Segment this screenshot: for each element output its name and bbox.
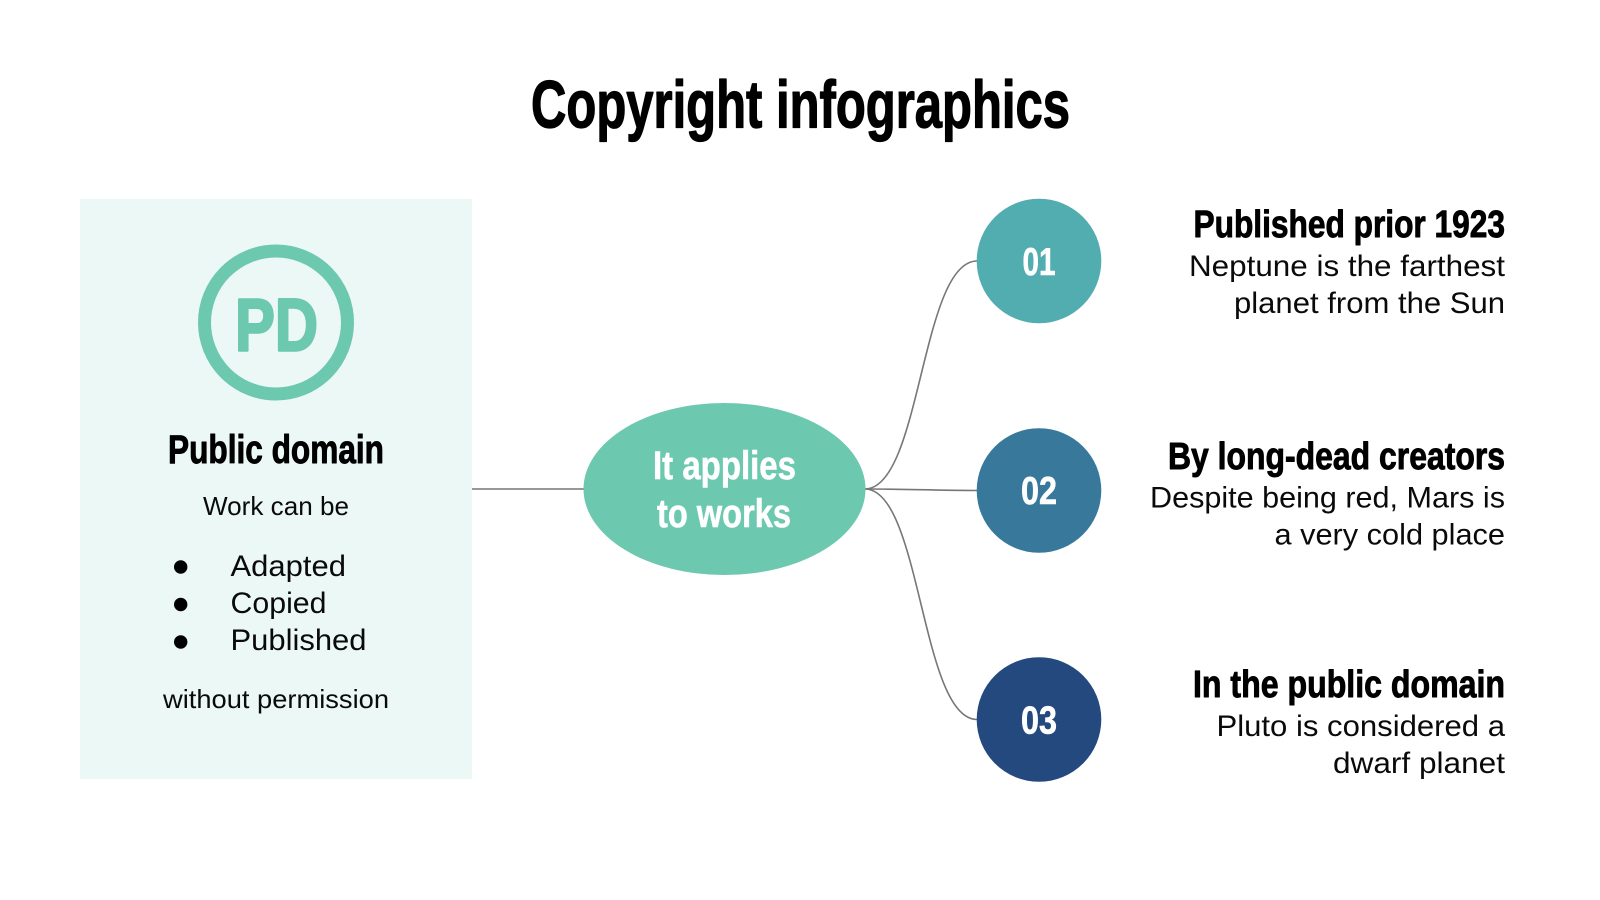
number circle 01 [977, 199, 1101, 323]
bullet list: Adapted [230, 550, 346, 583]
panel: public domain [80, 199, 472, 779]
item 1 text: Published prior 1923 [1194, 204, 1505, 246]
panel heading: Public domain [168, 428, 384, 472]
connectors [472, 261, 977, 720]
intro text: Work can be [203, 491, 349, 521]
bullet list: Published [230, 624, 366, 657]
icon: public domain badge [204, 251, 348, 394]
item 2 text: Despite being red, Mars is [1150, 482, 1505, 514]
number circle 03: 03 [1021, 700, 1057, 742]
item 1 text [1189, 204, 1506, 320]
item 1 text: planet from the Sun [1234, 287, 1505, 320]
closing text: without permission [162, 684, 389, 714]
bullet list: Copied [230, 587, 326, 620]
number circle 02: 02 [1021, 470, 1057, 513]
number circle 03 [977, 657, 1101, 782]
title: Copyright infographics [531, 68, 1070, 142]
item 1 text: Neptune is the farthest [1189, 250, 1506, 283]
central ellipse [584, 403, 866, 575]
item 3 text [1193, 664, 1506, 780]
central ellipse: to works [657, 492, 791, 536]
item 2 text: By long-dead creators [1168, 436, 1505, 478]
number circle 01: 01 [1022, 241, 1056, 284]
item 3 text: Pluto is considered a [1216, 710, 1505, 743]
item 2 text: a very cold place [1274, 518, 1505, 552]
bullet list [174, 550, 366, 657]
central ellipse: It applies [653, 444, 796, 488]
item 3 text: dwarf planet [1333, 747, 1506, 780]
item 2 text [1150, 436, 1505, 552]
number circle 02 [977, 428, 1101, 553]
item 3 text: In the public domain [1193, 664, 1505, 706]
icon: public domain badge: PD [235, 284, 318, 366]
